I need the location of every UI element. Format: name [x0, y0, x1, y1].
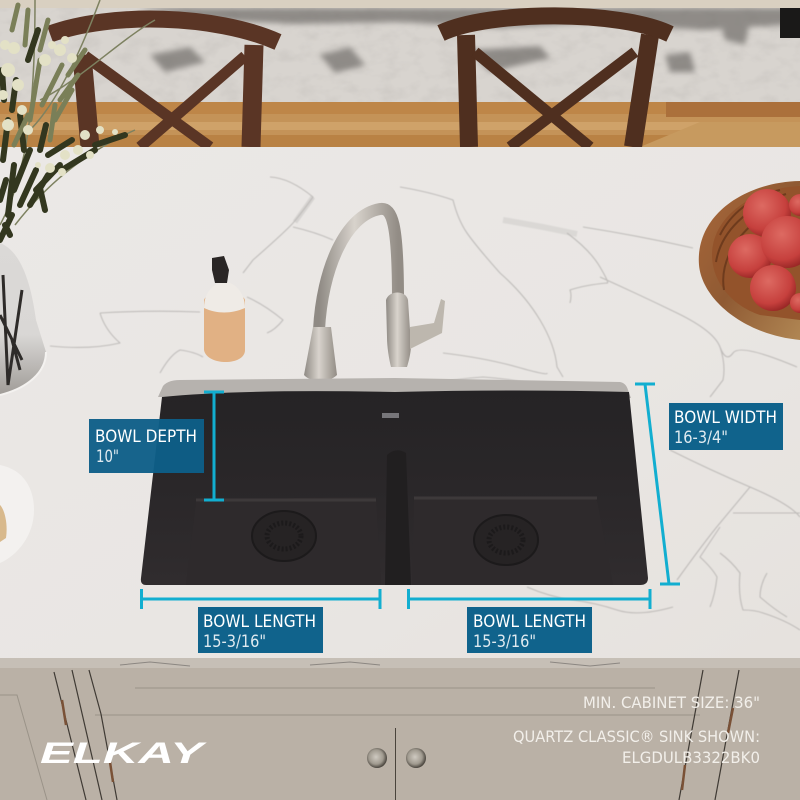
vase	[0, 243, 46, 395]
left drain	[252, 511, 316, 561]
marble veins	[50, 177, 800, 630]
dimension: bowl depth label: BOWL DEPTH	[95, 427, 197, 446]
dimension: left bowl length label: BOWL LENGTH	[203, 612, 316, 631]
dimension: left bowl length bracket	[141, 589, 380, 609]
sink model note: QUARTZ CLASSIC® SINK SHOWN:	[513, 727, 760, 746]
right bowl floor	[412, 497, 613, 585]
dimension: right bowl length label: BOWL LENGTH	[473, 612, 586, 631]
sink basin shell	[141, 390, 648, 585]
chair: right	[441, 16, 670, 147]
dimension: left bowl length label	[198, 607, 323, 653]
bowl floor edges	[196, 498, 597, 500]
dimension: bowl depth bracket	[204, 392, 224, 500]
soap dispenser	[204, 256, 245, 362]
dimension: bowl depth label: 10"	[96, 447, 119, 466]
left bowl floor	[186, 497, 381, 585]
marble countertop	[0, 147, 800, 658]
stems	[0, 0, 155, 225]
dimension: right bowl length label: 15-3/16"	[473, 632, 536, 651]
plant: greenery	[0, 0, 155, 240]
dimension: left bowl length label: 15-3/16"	[203, 632, 266, 651]
flowers	[0, 36, 118, 176]
right drain	[474, 515, 538, 565]
dimension: bowl width bracket	[635, 384, 680, 584]
dimension: right bowl length bracket	[408, 589, 650, 609]
faucet	[304, 209, 445, 381]
olive leaves	[12, 5, 85, 145]
sink model note	[513, 727, 760, 767]
sink badge	[382, 413, 399, 418]
dimension: right bowl length label	[467, 607, 592, 653]
plate with apple slices	[0, 465, 34, 563]
sink model note: ELGDULB3322BK0	[622, 748, 760, 767]
logo: Elkay: ELKAY	[40, 737, 208, 770]
chair: left	[50, 19, 278, 147]
fruit bowl with apples	[699, 181, 800, 340]
dimension: bowl width label	[669, 403, 783, 450]
center divider	[385, 450, 411, 585]
dimension: bowl depth label	[89, 419, 204, 473]
cabinets	[0, 658, 800, 800]
dimension: bowl width label: BOWL WIDTH	[674, 408, 777, 427]
sink basin	[141, 378, 648, 585]
dimension: bowl width label: 16-3/4"	[674, 428, 728, 447]
dark leaves	[0, 30, 125, 240]
sink rim	[158, 378, 631, 398]
cabinet size note: MIN. CABINET SIZE: 36"	[583, 693, 760, 712]
background: rug and wood floor behind the counter	[0, 0, 800, 147]
